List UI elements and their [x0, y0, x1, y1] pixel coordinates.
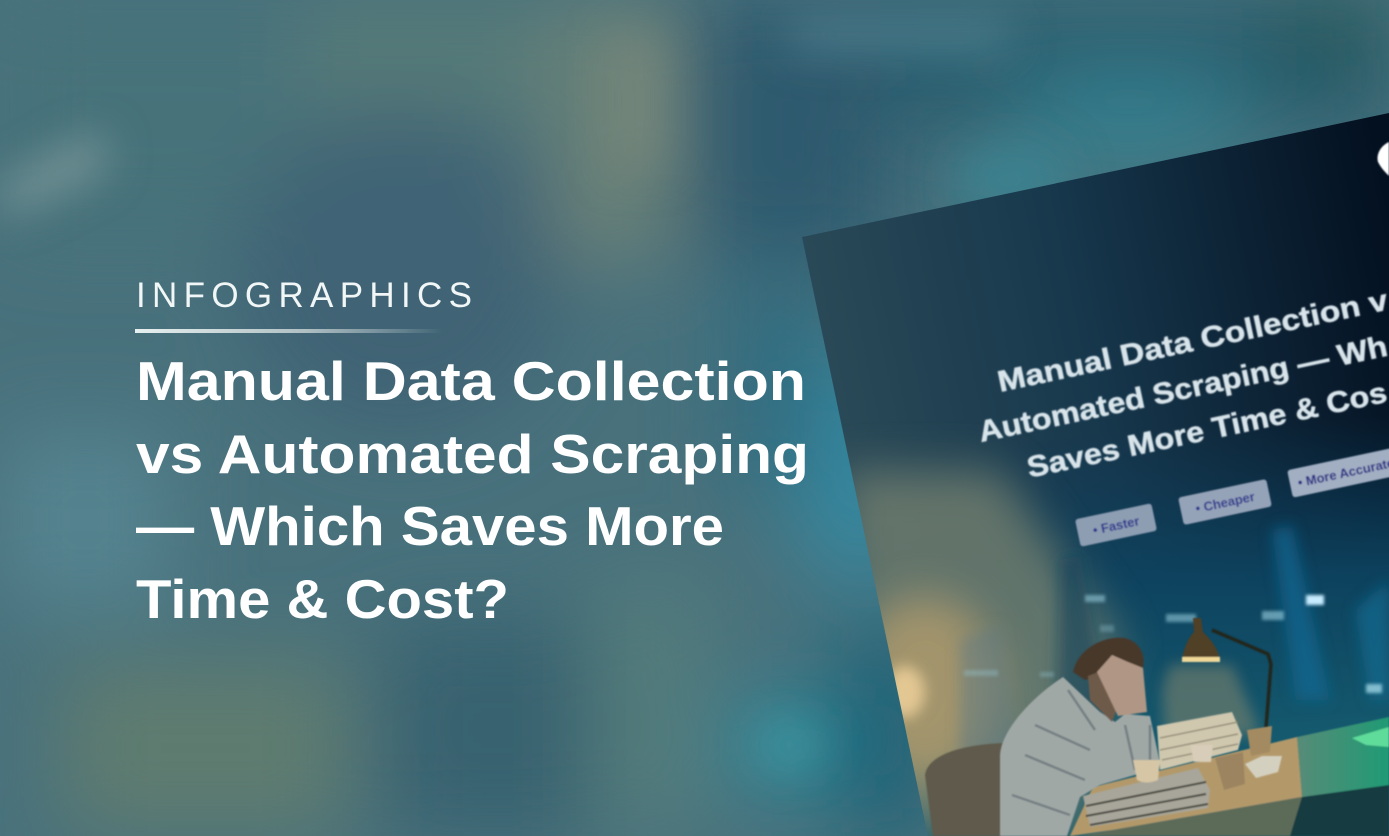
card background [800, 110, 1389, 836]
shirt [1000, 677, 1160, 836]
card title: Automated Scraping — Wh [976, 330, 1389, 449]
desk and green table [1070, 717, 1389, 836]
stacks of paper and coffee cups [1083, 712, 1282, 827]
city skyline at night [885, 525, 1389, 760]
main heading: Manual Data Collection [136, 350, 806, 412]
logo [1377, 142, 1389, 176]
main heading: Time & Cost? [136, 568, 509, 630]
back paper cup [1247, 726, 1272, 756]
cup [1133, 760, 1160, 782]
main heading: — Which Saves More [136, 495, 724, 557]
face [1088, 672, 1116, 722]
pill: Cheaper [1178, 479, 1272, 525]
mug [1190, 745, 1213, 762]
pill: Faster: • Faster [1091, 513, 1141, 538]
paper cup [1215, 752, 1245, 790]
category label: INFOGRAPHICS: INFOGRAPHICS [136, 276, 472, 315]
shirt creases [1012, 690, 1150, 815]
pill: Faster [1075, 503, 1157, 547]
divider rule [135, 329, 443, 333]
lamp glow [1162, 665, 1260, 735]
card title: Manual Data Collection v [995, 284, 1389, 399]
card title: Saves More Time & Cos [1024, 376, 1389, 485]
desk lamp [1182, 618, 1271, 728]
crumpled paper [1245, 756, 1282, 778]
office chair [925, 743, 1003, 836]
stressed man at desk [1000, 638, 1160, 836]
city window lights [964, 595, 1382, 693]
tilted infographic preview card [800, 110, 1389, 836]
hands [1097, 655, 1147, 716]
main heading: vs Automated Scraping [136, 423, 809, 485]
pill: More Accurate [1287, 443, 1389, 498]
main heading [136, 350, 809, 630]
hair [1073, 638, 1144, 680]
card title [980, 292, 1388, 478]
pill: Cheaper: • Cheaper [1194, 489, 1256, 516]
